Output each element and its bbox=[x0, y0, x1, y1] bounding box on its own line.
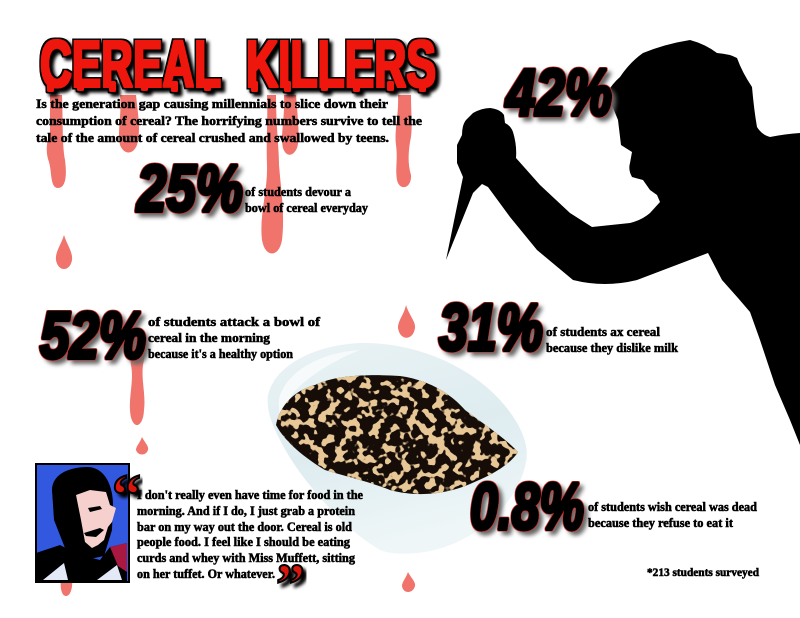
caption 52% bbox=[148, 314, 321, 361]
cereal bbox=[276, 375, 518, 494]
quote text: people food. I feel like I should be eating bbox=[137, 534, 350, 549]
torso bbox=[36, 543, 127, 582]
stat: 31%: 31% bbox=[439, 290, 543, 364]
title: Cereal Killers bbox=[40, 27, 436, 102]
caption 0.8%: because they refuse to eat it bbox=[588, 515, 734, 530]
caption 25%: of students devour a bbox=[245, 184, 351, 199]
caption 52%: because it's a healthy option bbox=[148, 346, 294, 361]
quote text: morning. And if I do, I just grab a protein bbox=[137, 503, 356, 518]
caption 52%: of students attack a bowl of bbox=[148, 314, 321, 329]
stat: 31% bbox=[439, 290, 679, 364]
red shirt shoulder bbox=[110, 543, 127, 572]
portrait photo bbox=[36, 464, 129, 582]
caption 31%: because they dislike milk bbox=[546, 340, 679, 355]
intro text: Is the generation gap causing millennials to slice down their bbox=[36, 96, 388, 111]
closing quotation mark: ” bbox=[276, 552, 305, 617]
quote text bbox=[137, 487, 363, 581]
caption 52%: cereal in the morning bbox=[148, 330, 271, 345]
facial features bbox=[84, 506, 104, 537]
title: Cereal Killers: KILLERS bbox=[246, 27, 436, 102]
stat: 52% bbox=[40, 298, 321, 372]
title: Cereal Killers: CEREAL bbox=[40, 27, 221, 102]
stat: 0.8% bbox=[470, 469, 758, 543]
stat: 52%: 52% bbox=[40, 298, 146, 372]
quote text: bar on my way out the door. Cereal is old bbox=[137, 519, 353, 534]
intro text: consumption of cereal? The horrifying numbers survive to tell the bbox=[36, 113, 422, 128]
quote text: curds and whey with Miss Muffett, sitting bbox=[137, 550, 355, 565]
bowl body bbox=[268, 343, 527, 554]
caption 25% bbox=[245, 184, 368, 215]
quote text: I don't really even have time for food in the bbox=[137, 487, 363, 502]
caption 0.8%: of students wish cereal was dead bbox=[588, 499, 758, 514]
stat: 25%: 25% bbox=[135, 151, 243, 225]
stat: 25% bbox=[135, 151, 368, 225]
bowl inner rim highlight bbox=[279, 350, 360, 440]
cereal bowl bbox=[268, 343, 527, 554]
footnote: *213 students surveyed bbox=[647, 567, 760, 579]
intro text: tale of the amount of cereal crushed and swallowed by teens. bbox=[36, 130, 389, 145]
stat: 0.8%: 0.8% bbox=[470, 469, 584, 543]
intro text bbox=[36, 96, 422, 145]
caption 0.8% bbox=[588, 499, 758, 530]
stat: 42%: 42% bbox=[504, 55, 612, 129]
quote text: on her tuffet. Or whatever. bbox=[137, 566, 275, 581]
white shirt sleeves bbox=[43, 563, 122, 580]
lit side of face bbox=[76, 490, 116, 548]
caption 25%: bowl of cereal everyday bbox=[245, 200, 368, 215]
silhouette: killer with knife bbox=[446, 40, 800, 445]
opening quotation mark: “ bbox=[112, 462, 141, 527]
hair and shadowed head bbox=[52, 467, 113, 560]
caption 31%: of students ax cereal bbox=[546, 324, 660, 339]
blood drips background bbox=[47, 95, 415, 596]
caption 31% bbox=[546, 324, 679, 355]
